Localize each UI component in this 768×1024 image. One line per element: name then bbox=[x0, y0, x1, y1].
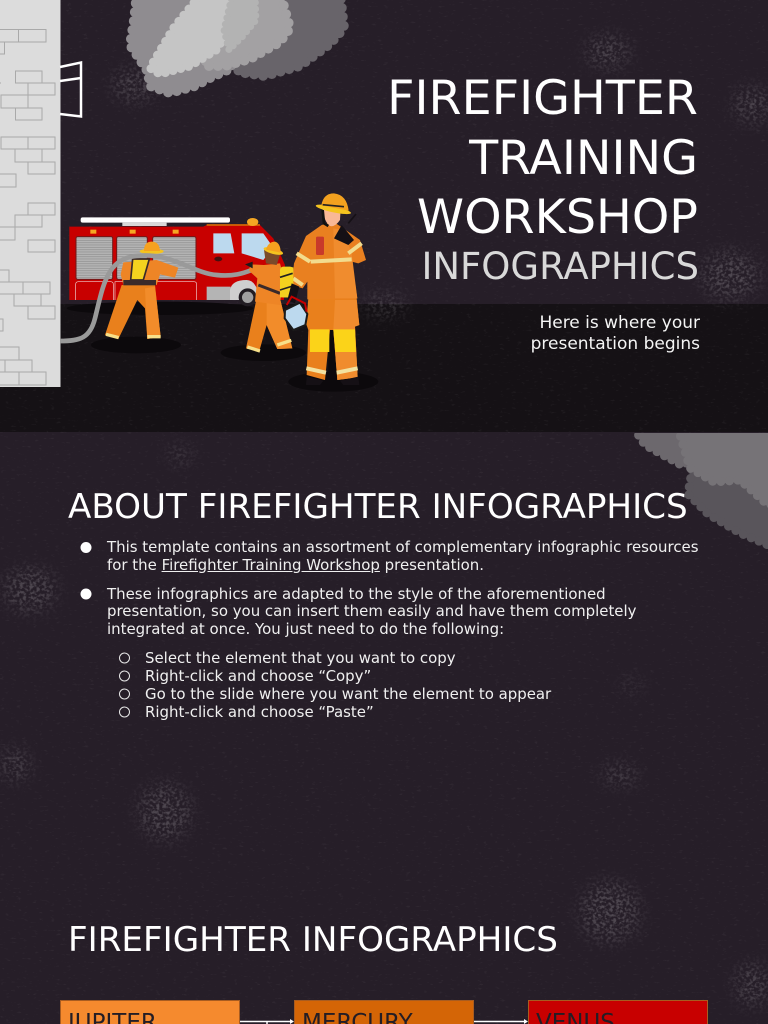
bullet text 2: integrated at once. You just need to do the following: bbox=[107, 620, 504, 638]
wall with bricks bbox=[0, 0, 60, 387]
window frame bbox=[60, 62, 81, 116]
radio and glove bbox=[334, 225, 354, 245]
box: Venus bbox=[528, 1000, 708, 1024]
glove bbox=[287, 283, 299, 303]
sub-list: Select the element that you want to copy bbox=[145, 649, 456, 667]
sub-list bbox=[145, 649, 552, 721]
box: Jupiter bbox=[60, 1000, 240, 1024]
lower smoke cloud bbox=[634, 428, 768, 545]
helmet bbox=[315, 203, 352, 216]
sub-list: Go to the slide where you want the element to appear bbox=[145, 685, 551, 703]
heading: infographics: FIREFIGHTER INFOGRAPHICS bbox=[68, 920, 558, 960]
title: FIREFIGHTER bbox=[387, 71, 698, 126]
bullet text 2 bbox=[106, 584, 636, 638]
boots bbox=[306, 377, 359, 385]
list bullets bbox=[80, 542, 130, 717]
tagline: Here is where your bbox=[539, 313, 700, 333]
fire hose bbox=[60, 255, 252, 341]
pants bbox=[306, 298, 359, 380]
tagline bbox=[531, 313, 700, 354]
face bbox=[323, 208, 341, 226]
bullet text 1 bbox=[106, 538, 699, 574]
title bbox=[387, 71, 698, 245]
tagline: presentation begins bbox=[531, 334, 700, 354]
badge bbox=[316, 237, 324, 255]
lantern bbox=[285, 303, 307, 330]
firefighter with tank bbox=[245, 242, 293, 351]
air tank bbox=[280, 267, 293, 297]
box: Mercury bbox=[294, 1000, 474, 1024]
bullet text 1: This template contains an assortment of complementary infographic resources bbox=[107, 538, 699, 556]
firefighter with hose bbox=[105, 242, 178, 339]
title: WORKSHOP bbox=[417, 190, 698, 245]
smoke cloud top bbox=[130, 0, 344, 93]
dark floor band bbox=[0, 304, 768, 432]
heading: about: ABOUT FIREFIGHTER INFOGRAPHICS bbox=[68, 487, 688, 527]
main firefighter with lantern bbox=[280, 193, 366, 385]
gap between legs bbox=[328, 327, 337, 378]
scene: fire truck and firefighters bbox=[60, 217, 378, 392]
ground shadows bbox=[67, 302, 378, 392]
jacket bbox=[292, 222, 366, 299]
title: TRAINING bbox=[469, 130, 698, 186]
subtitle: INFOGRAPHICS bbox=[421, 245, 699, 288]
sub-list: Right-click and choose “Copy” bbox=[145, 667, 371, 685]
fire truck bbox=[69, 217, 285, 306]
bullet text 2: presentation, so you can insert them easily and have them completely bbox=[107, 602, 636, 620]
flow arrows bbox=[240, 1019, 528, 1024]
sub-list: Right-click and choose “Paste” bbox=[145, 703, 374, 721]
bullet text 1: for the Firefighter Training Workshop presentation. bbox=[107, 556, 484, 574]
bullet text 2: These infographics are adapted to the style of the aforementioned bbox=[107, 584, 606, 602]
